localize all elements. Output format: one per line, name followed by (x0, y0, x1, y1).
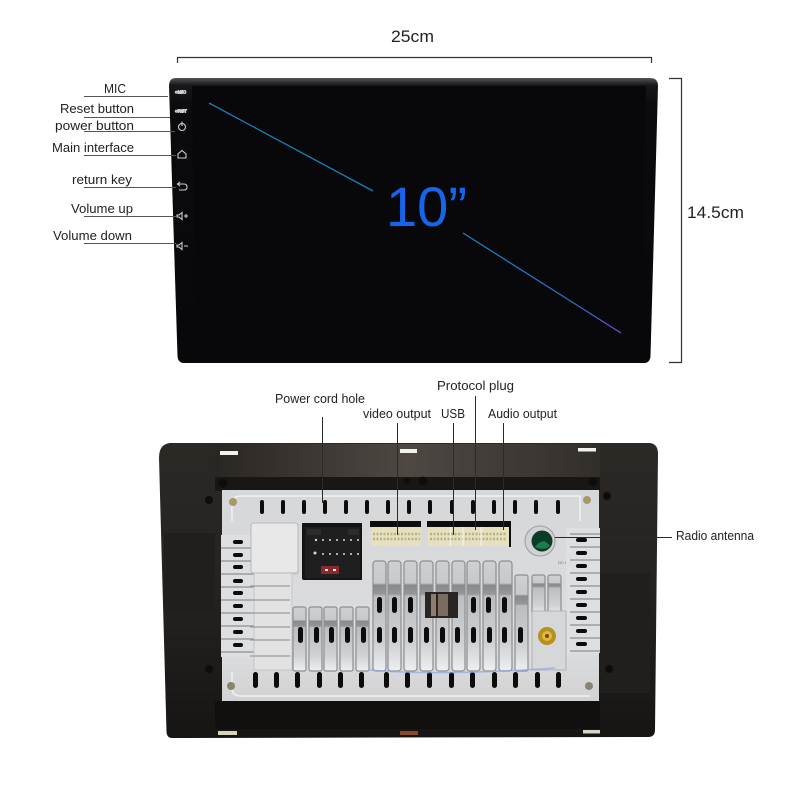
USB protocol audio connectors (427, 521, 511, 547)
metal plate (222, 490, 599, 701)
callouts: rear ports: USB (441, 406, 465, 421)
top vent slots (260, 500, 560, 514)
shadow band above plate (215, 477, 600, 491)
head unit back panel (159, 443, 658, 738)
power connector (302, 523, 362, 580)
side buttons (175, 90, 188, 250)
callouts: rear ports: video output (363, 406, 431, 421)
bottom vent slots (253, 672, 561, 688)
SMA antenna block (532, 611, 566, 670)
diagonal upper line (209, 103, 373, 191)
head unit front with screen (169, 78, 658, 363)
dark side panels (164, 533, 650, 693)
center cooling fins (293, 561, 561, 671)
outer shell (159, 443, 658, 738)
side buttons: ○RST (175, 108, 187, 114)
plate screws (227, 496, 593, 690)
callouts: rear ports: Radio antenna (676, 528, 755, 543)
left metal block (254, 524, 298, 670)
screen size text: 10” (386, 175, 467, 238)
callouts: front buttons: Volume down (53, 228, 132, 243)
radio antenna socket (525, 526, 569, 565)
dimension: width 25cm (178, 27, 652, 63)
dimension: width 25cm: 25cm (391, 27, 434, 46)
screws on shell (205, 476, 613, 673)
side buttons: ○MIC (175, 90, 187, 94)
callouts: rear ports: Protocol plug (437, 378, 514, 393)
callouts: front buttons: Reset button (60, 101, 134, 116)
icon: volume down (177, 242, 188, 250)
fuse (321, 566, 339, 574)
fin slots (298, 592, 523, 643)
callouts: front buttons: power button (55, 118, 134, 133)
screen glass (192, 86, 646, 350)
callouts: front buttons: Volume up (71, 201, 133, 216)
callouts: front buttons: Main interface (52, 140, 134, 155)
left heat sink fins (221, 535, 293, 657)
dimension: height 14.5cm: 14.5cm (687, 203, 744, 222)
callouts: front buttons: MIC (104, 81, 126, 96)
video output connector (370, 521, 421, 546)
dimension: height 14.5cm (669, 78, 744, 362)
blue reflection (370, 668, 555, 673)
diagonal lower line (463, 233, 621, 333)
radio antenna socket: DC IN (558, 560, 569, 565)
right heat sink fins (566, 528, 600, 653)
top brown band (215, 444, 600, 477)
mounting tabs (218, 448, 600, 735)
callouts: rear ports: Power cord hole (275, 391, 365, 406)
icon: home (178, 150, 186, 158)
callouts: front buttons (52, 81, 176, 244)
bottom shadow band (215, 701, 600, 729)
callouts: rear ports: Audio output (488, 406, 557, 421)
icon: power (178, 122, 186, 130)
icon: volume up (177, 212, 188, 220)
icon: back (178, 182, 187, 190)
callouts: rear ports (275, 378, 755, 543)
callouts: front buttons: return key (72, 172, 133, 187)
